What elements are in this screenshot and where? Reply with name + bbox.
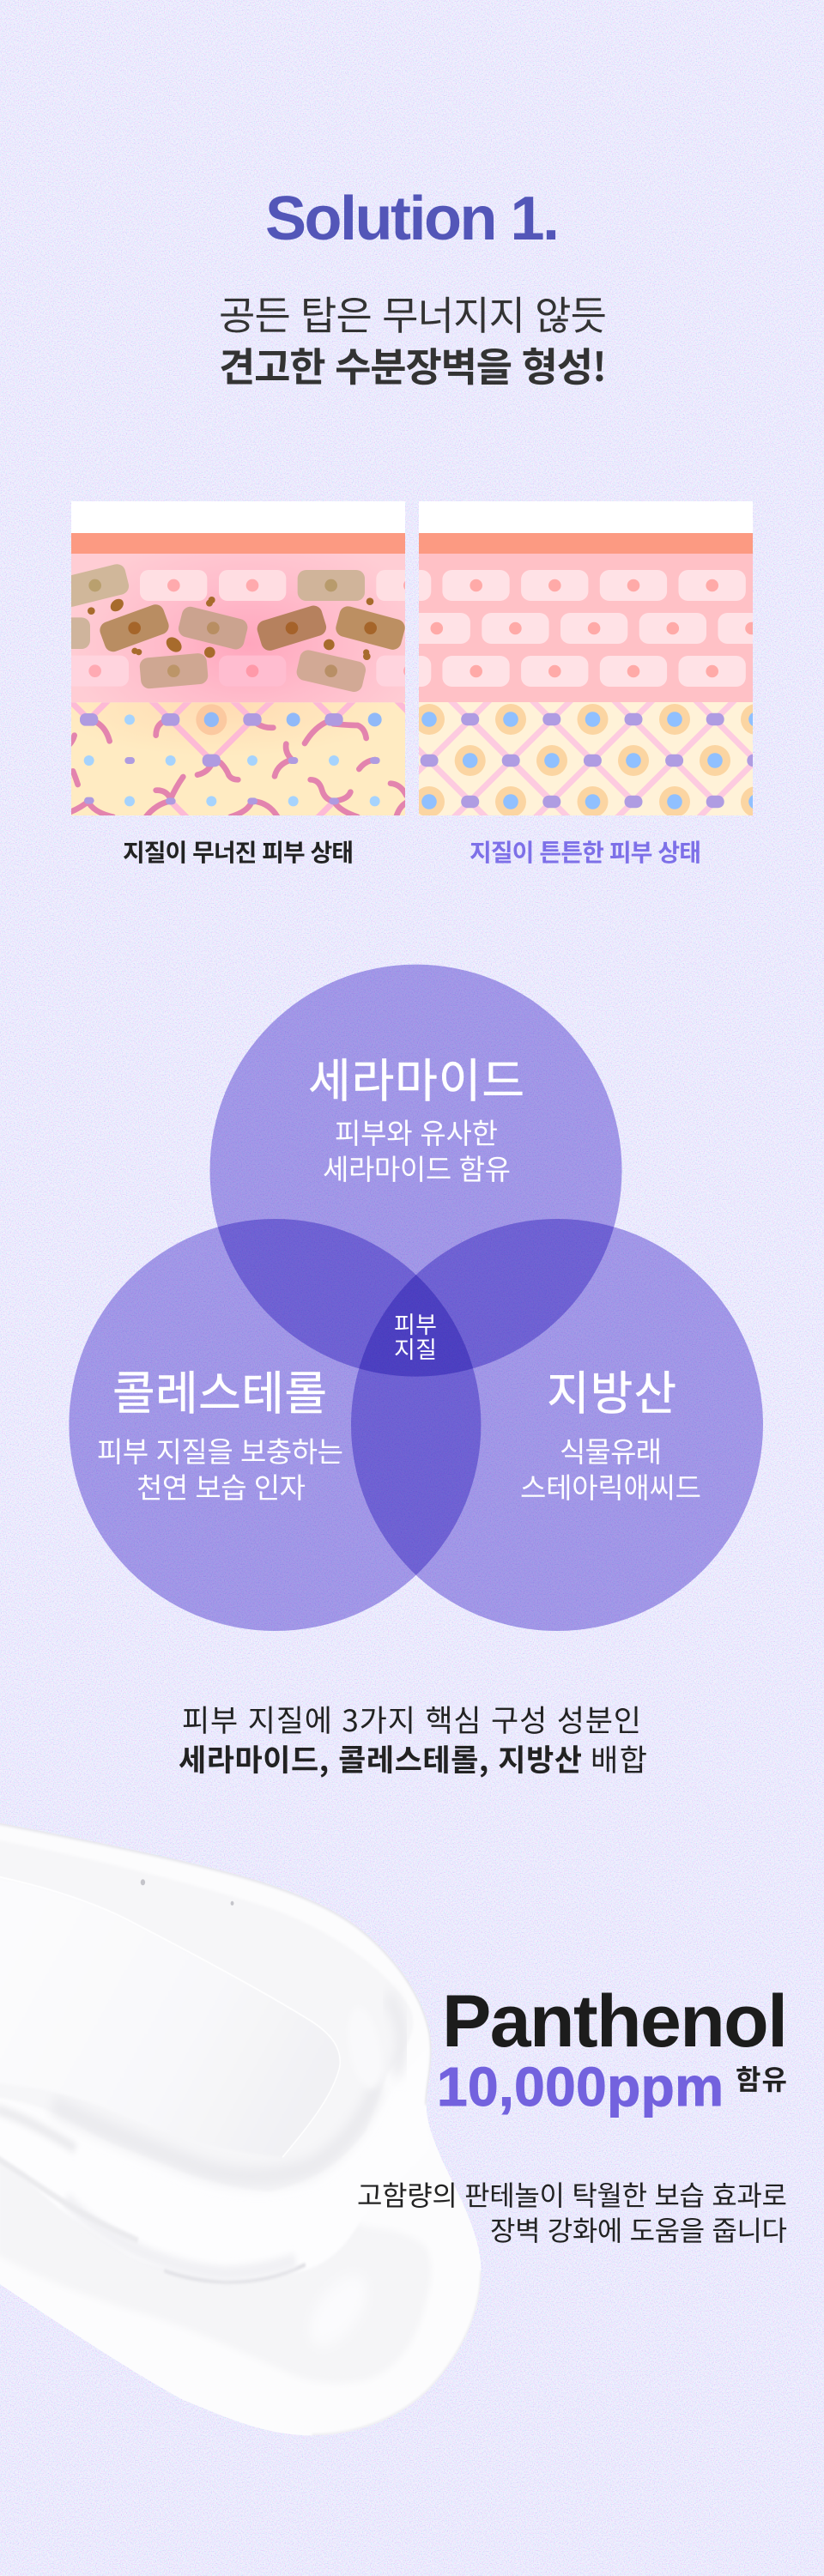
panthenol description [357, 2174, 787, 2249]
caption: healthy: 지질이 튼튼한 피부 상태 [470, 834, 701, 869]
heading: 10,000ppm: 10,000ppm [437, 2056, 724, 2118]
label: contains: 함유 [736, 2058, 787, 2098]
summary text: 배합 [591, 1737, 647, 1780]
label: cholesterol [97, 1355, 343, 1506]
fold shade [52, 2083, 378, 2177]
blue dots [204, 712, 382, 727]
summary text: 세라마이드, 콜레스테롤, 지방산 [179, 1737, 582, 1780]
keratinocyte row 3 [71, 650, 405, 692]
purple nodes [80, 713, 380, 804]
subtitle: 견고한 수분장벽을 형성! [219, 336, 607, 393]
label: skin lipid [394, 1306, 437, 1365]
flat area [0, 1877, 340, 2157]
keratinocyte row 2 [71, 604, 405, 652]
upper lobe [0, 1840, 413, 2191]
lattice [419, 702, 753, 815]
brown spots [88, 597, 373, 660]
nuclei [431, 579, 758, 677]
panel: damaged skin barrier [71, 501, 405, 815]
label: ceramide [308, 1043, 524, 1188]
fat cell rings [414, 704, 772, 817]
subtitle [219, 285, 607, 393]
label: fatty acid: 지방산 [547, 1355, 676, 1423]
keratinocyte row 1 [71, 564, 405, 607]
label: fatty acid: 식물유래 [560, 1429, 662, 1470]
cells [419, 570, 753, 687]
bottom lobe shade [0, 2155, 431, 2383]
label: cholesterol: 콜레스테롤 [112, 1355, 327, 1423]
panthenol description: 고함량의 판테놀이 탁월한 보습 효과로 [357, 2174, 787, 2214]
label: skin lipid: 지질 [394, 1331, 437, 1365]
cream swatch [0, 1803, 493, 2459]
label: ceramide: 피부와 유사한 [335, 1111, 498, 1152]
fat tissue ring [196, 704, 227, 735]
title: Solution 1. [265, 185, 560, 253]
panel: healthy skin barrier [419, 501, 753, 815]
circle: ceramide [209, 965, 621, 1377]
heading: panthenol: Panthenol [442, 1980, 788, 2063]
label: cholesterol: 피부 지질을 보충하는 [97, 1429, 343, 1470]
circle: fatty acid [351, 1219, 763, 1631]
label: ceramide: 세라마이드 [308, 1043, 524, 1111]
label: fatty acid [520, 1355, 701, 1506]
caption: damaged: 지질이 무너진 피부 상태 [123, 834, 354, 869]
broken fibres [69, 719, 406, 817]
venn diagram [69, 965, 763, 1631]
summary text: 피부 지질에 3가지 핵심 구성 성분인 [182, 1697, 641, 1741]
label: skin lipid: 피부 [394, 1306, 437, 1340]
middle lobe [0, 2048, 430, 2282]
summary text [179, 1697, 647, 1780]
lattice lines [67, 698, 412, 820]
highlight on edge [266, 1994, 341, 2158]
label: cholesterol: 천연 보습 인자 [136, 1465, 306, 1506]
blue centres [421, 712, 764, 809]
purple pills [421, 713, 765, 808]
air bubbles [141, 1879, 145, 1885]
label: fatty acid: 스테아릭애씨드 [520, 1465, 701, 1506]
circle: cholesterol [69, 1219, 481, 1631]
rim shade [0, 1822, 432, 2105]
label: ceramide: 세라마이드 함유 [323, 1147, 511, 1188]
subtitle: 공든 탑은 무너지지 않듯 [219, 285, 607, 342]
panthenol description: 장벽 강화에 도움을 줍니다 [490, 2209, 787, 2249]
